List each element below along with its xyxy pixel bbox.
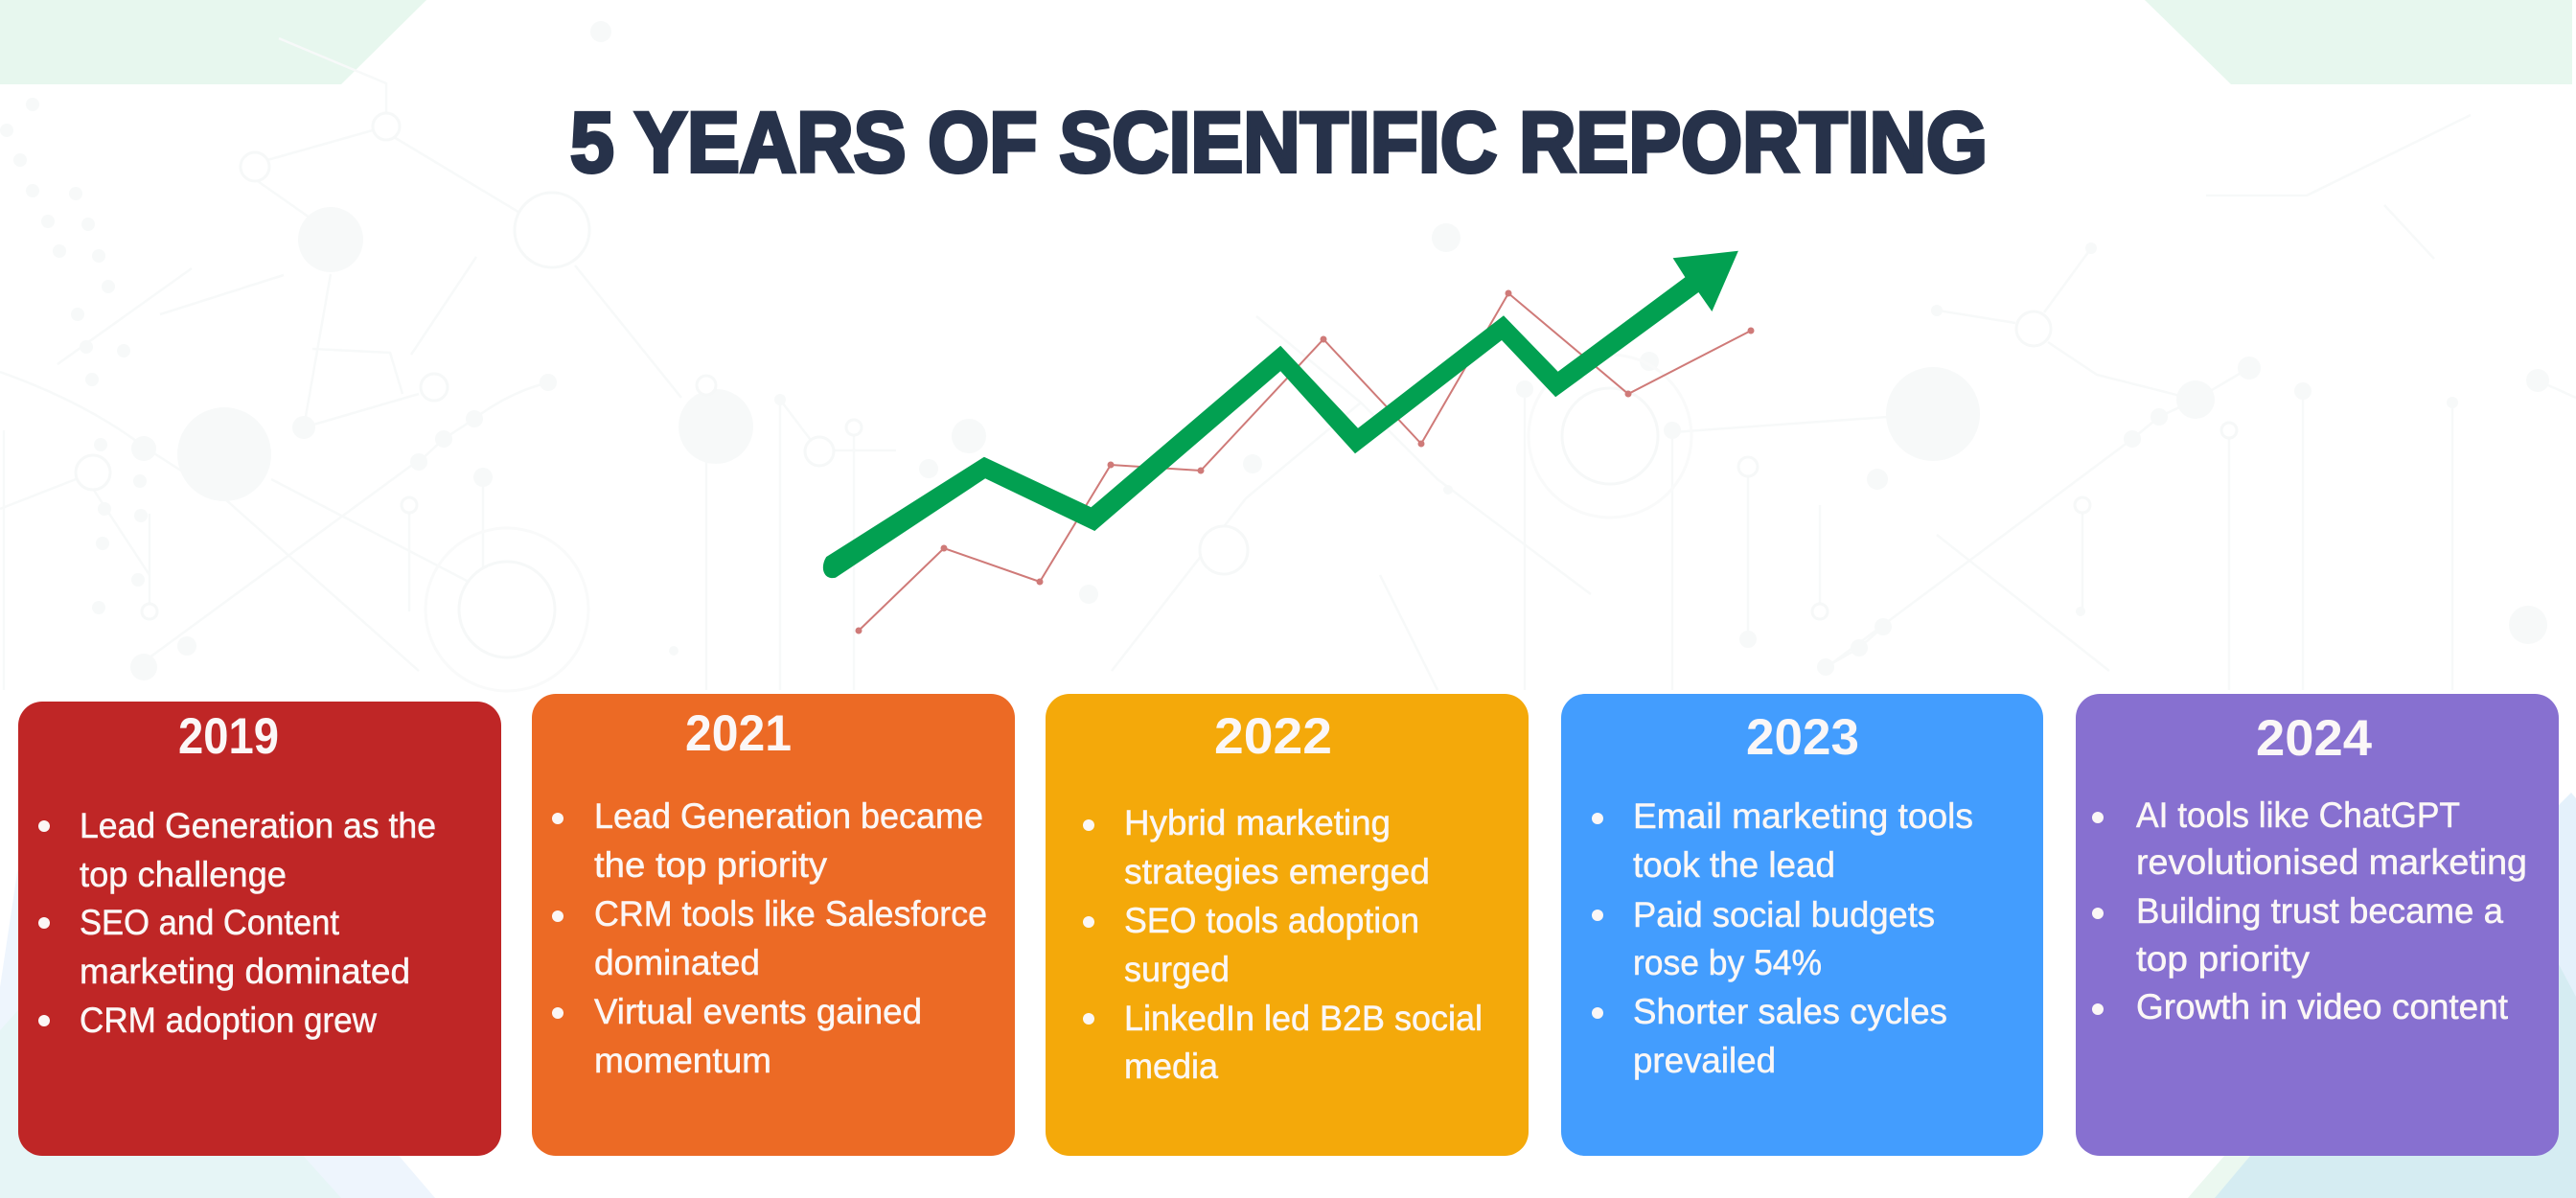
panel: 2024 (2076, 694, 2559, 1156)
bullet list 2023: Paid social budgets (1633, 895, 1935, 934)
bullet list 2023: Shorter sales cycles (1633, 992, 1947, 1031)
panel: 2023 (1561, 694, 2043, 1156)
bullet list 2022: surged (1124, 950, 1230, 989)
panel: 2022 (1046, 694, 1529, 1156)
title: 5 YEARS OF SCIENTIFIC REPORTING (570, 94, 1988, 190)
bullet list 2021: Lead Generation became (594, 796, 983, 836)
bullet list 2023: rose by 54% (1633, 943, 1822, 982)
bullet list 2019 (38, 806, 436, 1040)
panel: 2021 (532, 694, 1015, 1156)
bullet list 2024: revolutionised marketing (2136, 842, 2527, 882)
year heading 2023: 2023 (1746, 709, 1859, 766)
bullet list 2021: the top priority (594, 845, 828, 885)
bullet list 2022: media (1124, 1047, 1218, 1086)
bullet list 2021: Virtual events gained (594, 992, 922, 1031)
bullet list 2019: CRM adoption grew (80, 1001, 377, 1040)
bullet list 2022: strategies emerged (1124, 852, 1430, 891)
bullet list 2021 (552, 796, 987, 1080)
panel: 2019 (18, 702, 501, 1156)
bullet list 2023: prevailed (1633, 1041, 1776, 1080)
year heading 2019: 2019 (178, 708, 279, 765)
bullet list 2024 (2092, 795, 2527, 1026)
bullet list 2023: Email marketing tools (1633, 796, 1973, 836)
bullet list 2022: SEO tools adoption (1124, 901, 1419, 940)
bullet list 2019: Lead Generation as the (80, 806, 436, 845)
bullet list 2021: dominated (594, 943, 760, 982)
bullet list 2023 (1592, 796, 1973, 1080)
arrow: green growth line (823, 251, 1738, 578)
bullet list 2024: top priority (2136, 939, 2311, 979)
bullet list 2021: CRM tools like Salesforce (594, 894, 987, 933)
bullet list 2019: marketing dominated (80, 952, 410, 991)
thin red line chart (855, 289, 1754, 634)
bullet list 2019: top challenge (80, 855, 287, 894)
background network pattern (0, 21, 2576, 691)
bullet list 2021: momentum (594, 1041, 771, 1080)
bullet list 2024: Building trust became a (2136, 891, 2503, 931)
bullet list 2023: took the lead (1633, 845, 1835, 885)
year heading 2021: 2021 (685, 705, 792, 762)
bullet list 2022: LinkedIn led B2B social (1124, 999, 1483, 1038)
year heading 2024: 2024 (2256, 710, 2373, 767)
bullet list 2022: Hybrid marketing (1124, 803, 1391, 842)
bullet list 2022 (1083, 803, 1483, 1086)
bullet list 2019: SEO and Content (80, 903, 340, 942)
bullet list 2024: Growth in video content (2136, 987, 2509, 1026)
bullet list 2024: AI tools like ChatGPT (2136, 795, 2460, 835)
year heading 2022: 2022 (1214, 708, 1332, 765)
